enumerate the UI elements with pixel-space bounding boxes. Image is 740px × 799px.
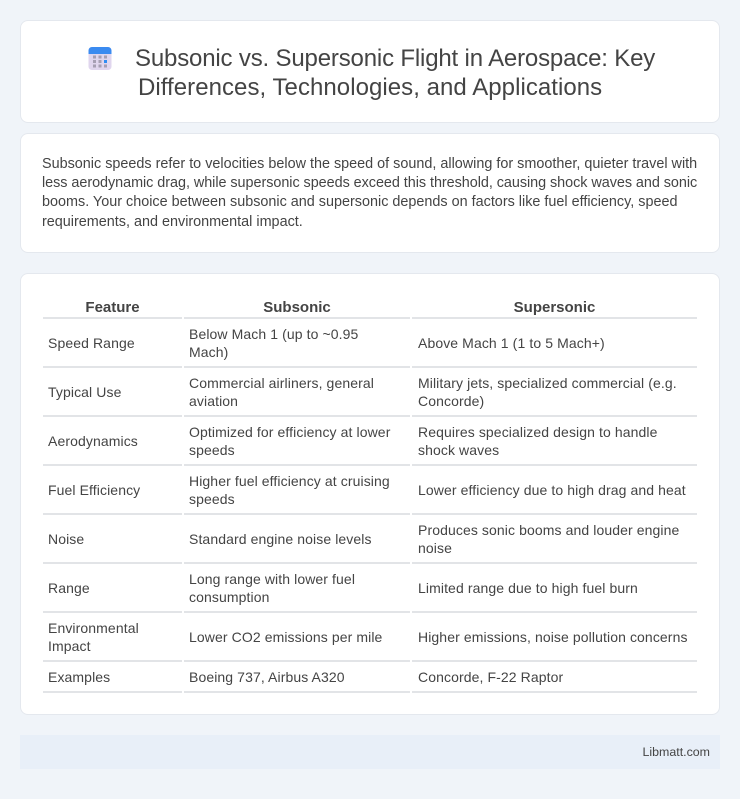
title	[135, 45, 656, 101]
row: Speed Range: Speed Range	[48, 335, 135, 351]
row: Aerodynamics: Aerodynamics	[48, 433, 138, 449]
Typical Use subsonic: Commercial airliners, general	[189, 375, 374, 391]
intro panel	[20, 133, 720, 253]
row: Typical Use: Typical Use	[48, 384, 121, 400]
row: Environmental Impact: Environmental	[48, 620, 139, 636]
Range subsonic: Long range with lower fuel	[189, 571, 355, 587]
row: Environmental Impact: Impact	[48, 638, 91, 654]
Noise subsonic: Standard engine noise levels	[189, 531, 372, 547]
intro text: Subsonic speeds refer to velocities below the speed of sound, allowing for smoother, quieter travel with	[42, 156, 697, 172]
footer credit: Libmatt.com	[643, 745, 710, 759]
table header: Feature: Feature	[85, 299, 140, 316]
row: Fuel Efficiency: Fuel Efficiency	[48, 482, 140, 498]
table header: Supersonic: Supersonic	[514, 299, 595, 316]
intro text: less aerodynamic drag, while supersonic speeds exceed this threshold, causing shock waves and sonic	[42, 175, 697, 191]
row: Noise: Noise	[48, 531, 84, 547]
Examples subsonic: Boeing 737, Airbus A320	[189, 669, 345, 685]
intro text: booms. Your choice between subsonic and supersonic depends on factors like fuel efficiency, speed	[42, 194, 677, 210]
intro text: requirements, and environmental impact.	[42, 214, 303, 230]
Speed Range subsonic: Mach)	[189, 344, 228, 360]
table panel	[20, 273, 720, 715]
title: Subsonic vs. Supersonic Flight in Aerospace: Key	[135, 45, 655, 72]
Examples supersonic: Concorde, F-22 Raptor	[418, 669, 563, 685]
Noise supersonic: Produces sonic booms and louder engine	[418, 522, 679, 538]
Aerodynamics subsonic: Optimized for efficiency at lower	[189, 424, 390, 440]
footer	[20, 735, 720, 769]
Aerodynamics subsonic	[189, 424, 390, 458]
Fuel Efficiency subsonic: speeds	[189, 491, 235, 507]
Speed Range subsonic	[189, 326, 358, 360]
icon: calendar	[88, 47, 112, 70]
Noise supersonic	[418, 522, 679, 556]
Typical Use supersonic	[418, 375, 677, 409]
Typical Use supersonic: Concorde)	[418, 393, 484, 409]
Speed Range subsonic: Below Mach 1 (up to ~0.95	[189, 326, 358, 342]
Aerodynamics subsonic: speeds	[189, 442, 235, 458]
Range supersonic: Limited range due to high fuel burn	[418, 580, 638, 596]
Aerodynamics supersonic: shock waves	[418, 442, 499, 458]
Environmental Impact subsonic: Lower CO2 emissions per mile	[189, 629, 382, 645]
header card	[20, 20, 720, 123]
Fuel Efficiency subsonic: Higher fuel efficiency at cruising	[189, 473, 390, 489]
Range subsonic: consumption	[189, 589, 269, 605]
title: Differences, Technologies, and Applications	[138, 74, 602, 101]
Aerodynamics supersonic	[418, 424, 658, 458]
Range subsonic	[189, 571, 355, 605]
Fuel Efficiency supersonic: Lower efficiency due to high drag and heat	[418, 482, 686, 498]
Typical Use subsonic	[189, 375, 374, 409]
Typical Use supersonic: Military jets, specialized commercial (e.g.	[418, 375, 677, 391]
row: Range: Range	[48, 580, 90, 596]
Noise supersonic: noise	[418, 540, 452, 556]
row: Environmental Impact	[48, 620, 139, 654]
Speed Range supersonic: Above Mach 1 (1 to 5 Mach+)	[418, 335, 605, 351]
intro text	[42, 156, 697, 230]
Aerodynamics supersonic: Requires specialized design to handle	[418, 424, 658, 440]
row: Examples: Examples	[48, 669, 110, 685]
table header: Subsonic: Subsonic	[263, 299, 331, 316]
Typical Use subsonic: aviation	[189, 393, 238, 409]
Environmental Impact supersonic: Higher emissions, noise pollution concerns	[418, 629, 688, 645]
Fuel Efficiency subsonic	[189, 473, 390, 507]
